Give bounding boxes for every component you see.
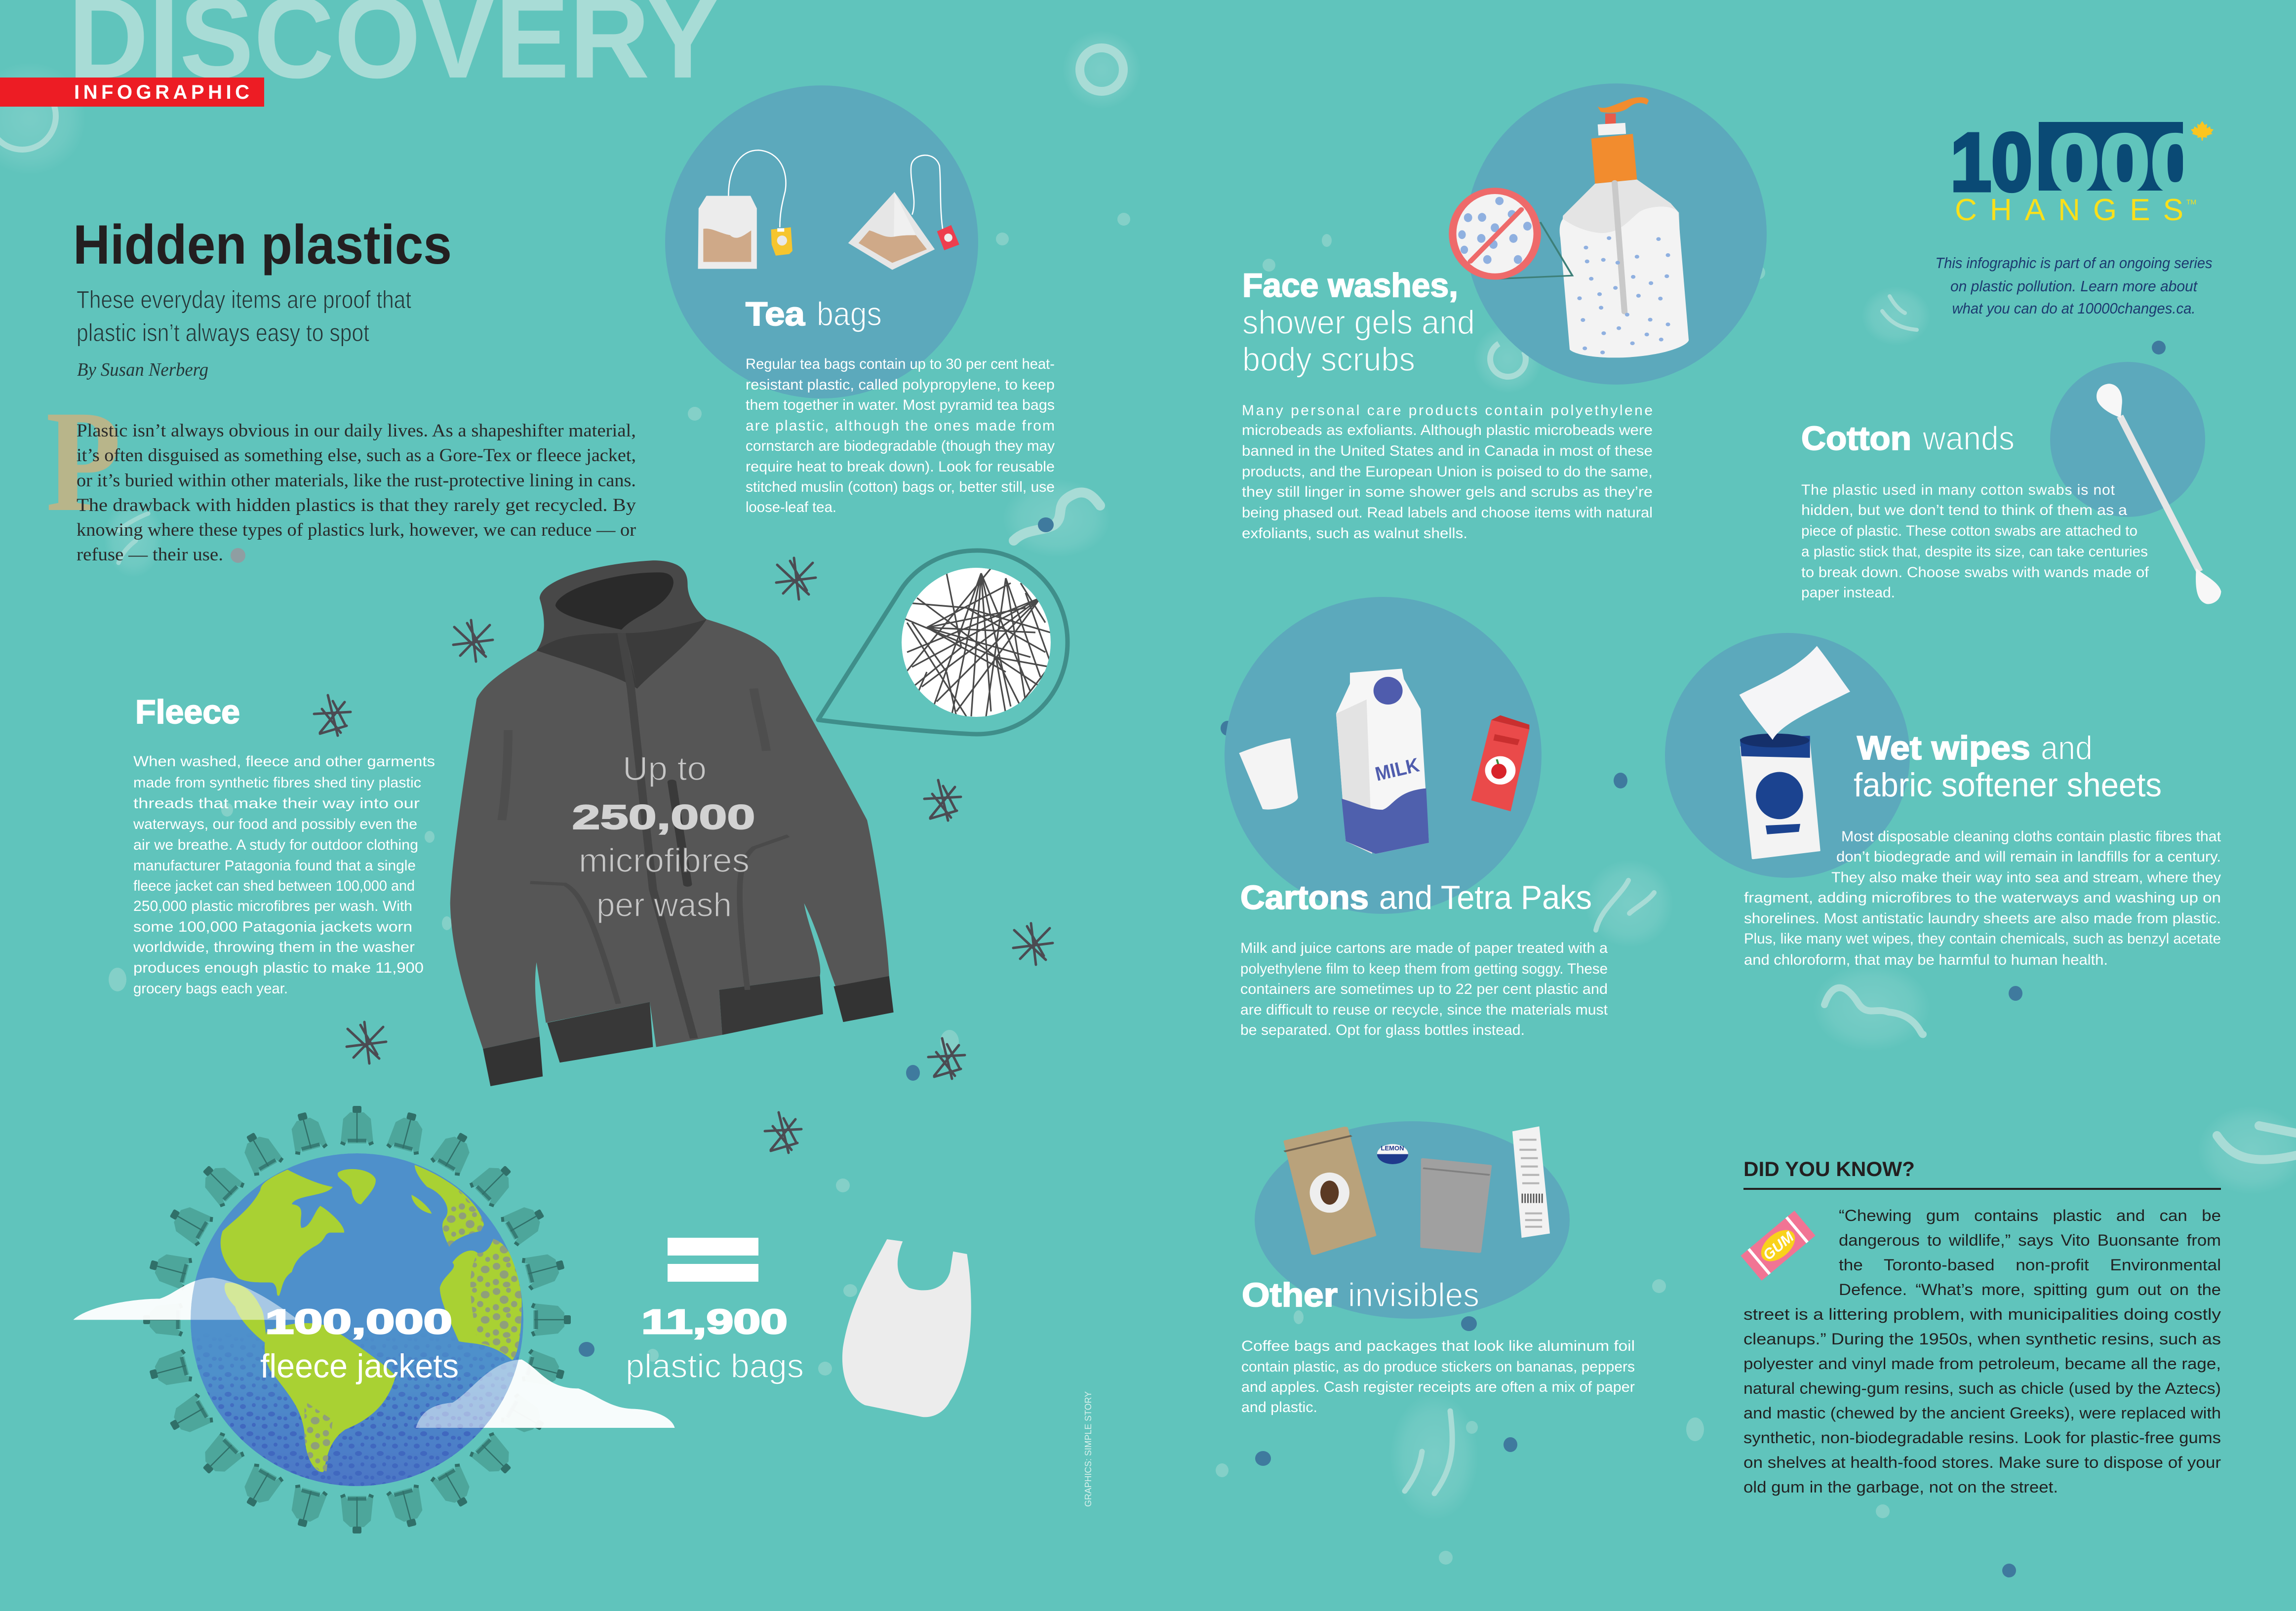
panel: tea bags bbox=[665, 85, 1055, 515]
text: tea bags: stitched muslin (cotton) bags or, better still, use bbox=[746, 479, 1055, 495]
text: did you know: polyester and vinyl made from petroleum, became all the rage, bbox=[1743, 1355, 2221, 1373]
jacket callout text: Up to bbox=[623, 750, 707, 787]
text: cotton wands: hidden, but we don’t tend to think of them as a bbox=[1801, 502, 2127, 518]
text: cartons: polyethylene film to keep them from getting soggy. These bbox=[1240, 961, 1608, 977]
text: wet wipes: They also make their way into sea and stream, where they bbox=[1831, 869, 2221, 886]
icon: square tea bag bbox=[698, 150, 792, 269]
text: cartons: be separated. Opt for glass bottles instead. bbox=[1240, 1022, 1525, 1038]
face wash circle bbox=[1465, 83, 1767, 385]
heading: other invisibles: Other bbox=[1242, 1276, 1338, 1314]
drop cap: P bbox=[46, 380, 121, 542]
heading: tea bags bbox=[746, 295, 882, 333]
icon: cotton swab bbox=[2097, 384, 2221, 604]
text: fleece: made from synthetic fibres shed tiny plastic bbox=[133, 775, 421, 791]
text: tea bags: Regular tea bags contain up to 30 per cent heat- bbox=[746, 356, 1055, 372]
wipes circle bbox=[1665, 633, 1910, 878]
text: did you know: cleanups.” During the 1950s, when synthetic resins, such as bbox=[1743, 1330, 2221, 1348]
icon: pump bottle bbox=[1560, 97, 1689, 357]
infographic tab: INFOGRAPHIC bbox=[74, 81, 249, 103]
text: cartons: Milk and juice cartons are made of paper treated with a bbox=[1240, 940, 1608, 956]
byline: By Susan Nerberg bbox=[77, 359, 208, 380]
text: wet wipes: Plus, like many wet wipes, they contain chemicals, such as benzyl acetate bbox=[1744, 931, 2221, 947]
intro paragraph: or it’s buried within other materials, like the rust-protective lining in cans. bbox=[77, 471, 636, 491]
dark bubbles bbox=[579, 341, 2166, 1577]
icon: plastic bag bbox=[842, 1239, 971, 1417]
icon: end mark bbox=[231, 548, 245, 563]
heading: face washes: body scrubs bbox=[1242, 341, 1415, 378]
intro paragraph bbox=[77, 421, 636, 565]
heading: other invisibles bbox=[1242, 1276, 1479, 1314]
text: tea bags: loose-leaf tea. bbox=[746, 499, 836, 515]
text: fleece: 250,000 plastic microfibres per wash. With bbox=[133, 898, 412, 914]
panel: cotton wands bbox=[1801, 362, 2221, 604]
text: wet wipes: shorelines. Most antistatic laundry sheets are also made from plastic. bbox=[1744, 910, 2221, 927]
carton circle bbox=[1225, 597, 1542, 914]
text: fleece: some 100,000 Patagonia jackets worn bbox=[133, 919, 412, 935]
stat: 100,000 fleece jackets: fleece jackets bbox=[260, 1347, 459, 1385]
text: face washes bbox=[1242, 402, 1653, 542]
text: did you know: the Toronto-based non-profit Environmental bbox=[1839, 1256, 2221, 1274]
text: did you know: Defence. “What’s more, spitting gum out on the bbox=[1839, 1281, 2221, 1298]
logo: 10000 Changes: TM bbox=[2186, 198, 2196, 206]
text: cotton wands: piece of plastic. These cotton swabs are attached to bbox=[1801, 523, 2138, 539]
text: fleece: threads that make their way into our bbox=[133, 795, 420, 812]
panel: did you know bbox=[1741, 1157, 2221, 1496]
text: tea bags: are plastic, although the ones made from bbox=[746, 418, 1055, 434]
text: other invisibles: and plastic. bbox=[1241, 1399, 1317, 1415]
panel: wet wipes bbox=[1665, 633, 2221, 968]
text: fleece: waterways, our food and possibly even the bbox=[133, 816, 417, 832]
text: other invisibles: and apples. Cash register receipts are often a mix of paper bbox=[1241, 1379, 1635, 1395]
icon: gum bbox=[1741, 1211, 1816, 1281]
heading: tea bags: bags bbox=[817, 295, 882, 333]
logo: 10000 Changes: 10 bbox=[1950, 117, 2032, 208]
text: other invisibles bbox=[1241, 1338, 1635, 1415]
heading: face washes: shower gels and bbox=[1242, 304, 1475, 341]
stat: 11,900 plastic bags: 11,900 bbox=[641, 1302, 788, 1341]
text: face washes: microbeads as exfoliants. Although plastic microbeads were bbox=[1242, 422, 1653, 438]
cotton circle bbox=[2050, 362, 2205, 517]
sticker label: LEMON bbox=[1381, 1144, 1404, 1152]
heading: face washes: Face washes, bbox=[1242, 267, 1458, 304]
panel: fleece bbox=[133, 550, 1068, 1086]
logo: 10000 Changes bbox=[1953, 121, 2214, 220]
heading: fleece: Fleece bbox=[135, 693, 240, 731]
text: face washes: products, and the European Union is poised to do the same, bbox=[1242, 464, 1653, 480]
other circle bbox=[1255, 1121, 1570, 1319]
jacket callout text bbox=[572, 750, 755, 924]
text: cartons: are difficult to reuse or recycle, since the materials must bbox=[1240, 1002, 1608, 1018]
text: did you know: “Chewing gum contains plastic and can be bbox=[1839, 1207, 2221, 1224]
earth and jackets bbox=[73, 1106, 675, 1533]
heading: wet wipes: and bbox=[2041, 729, 2093, 767]
text: did you know: on shelves at health-food stores. Make sure to dispose of your bbox=[1743, 1454, 2221, 1471]
clouds over earth bbox=[73, 1278, 675, 1428]
heading: wet wipes: Wet wipes bbox=[1857, 729, 2030, 767]
jacket callout text: per wash bbox=[596, 886, 732, 924]
icon: no microbeads bbox=[1453, 191, 1572, 279]
stat: 100,000 fleece jackets: 100,000 bbox=[265, 1302, 452, 1341]
text: tea bags: resistant plastic, called polypropylene, to keep bbox=[746, 377, 1055, 393]
heading: cotton wands: Cotton bbox=[1801, 420, 1911, 457]
text: cotton wands bbox=[1801, 482, 2149, 601]
text: wet wipes: Most disposable cleaning cloths contain plastic fibres that bbox=[1841, 828, 2221, 845]
icon: wipes canister bbox=[1740, 646, 1850, 859]
milk label: MILK bbox=[1373, 754, 1422, 786]
text: series note bbox=[1936, 254, 2212, 317]
jacket callout text: microfibres bbox=[579, 842, 750, 879]
text: other invisibles: Coffee bags and packages that look like aluminum foil bbox=[1241, 1338, 1635, 1354]
heading: wet wipes: fabric softener sheets bbox=[1854, 766, 2162, 804]
equals sign bbox=[668, 1238, 758, 1282]
clouds behind bbox=[73, 1278, 675, 1428]
text: cotton wands: a plastic stick that, despite its size, can take centuries bbox=[1801, 544, 2148, 560]
text: face washes: banned in the United States and in Canada in most of these bbox=[1242, 443, 1653, 459]
intro paragraph: it’s often disguised as something else, such as a Gore-Tex or fleece jacket, bbox=[77, 445, 636, 466]
stat: 100,000 fleece jackets bbox=[260, 1302, 459, 1385]
text: did you know: natural chewing-gum resins, such as chicle (used by the Aztecs) bbox=[1743, 1379, 2221, 1397]
heading: cartons bbox=[1240, 879, 1592, 916]
heading: did you know: DID YOU KNOW? bbox=[1743, 1157, 1915, 1180]
text: face washes: exfoliants, such as walnut shells. bbox=[1242, 525, 1467, 542]
text: other invisibles: contain plastic, as do produce stickers on bananas, peppers bbox=[1241, 1359, 1635, 1375]
intro paragraph: Plastic isn’t always obvious in our daily lives. As a shapeshifter material, bbox=[77, 421, 636, 441]
heading: cartons: Cartons bbox=[1240, 879, 1369, 916]
subtitle: plastic isn’t always easy to spot bbox=[77, 319, 369, 347]
text: did you know: old gum in the garbage, not on the street. bbox=[1743, 1478, 2058, 1496]
icon: maple leaf bbox=[2191, 121, 2214, 141]
icon: cup, milk carton, juice box bbox=[1239, 668, 1529, 854]
icons: microfibre scribbles bbox=[314, 558, 1053, 1153]
text: series note: This infographic is part of an ongoing series bbox=[1936, 254, 2212, 272]
title: Hidden plastics bbox=[73, 214, 452, 275]
ring of jackets bbox=[143, 1106, 571, 1533]
text: cotton wands: The plastic used in many cotton swabs is not bbox=[1801, 482, 2115, 498]
text: series note: what you can do at 10000changes.ca. bbox=[1952, 300, 2195, 317]
jacket illustration bbox=[450, 560, 894, 1086]
icon: coffee bag, foil bag, receipt bbox=[1284, 1126, 1550, 1254]
text: wet wipes: don’t biodegrade and will remain in landfills for a century. bbox=[1836, 849, 2221, 865]
text: fleece: grocery bags each year. bbox=[133, 981, 288, 997]
heading: cotton wands: wands bbox=[1922, 420, 2015, 457]
text: face washes: Many personal care products contain polyethylene bbox=[1242, 402, 1653, 419]
text: fleece: worldwide, throwing them in the washer bbox=[133, 939, 415, 955]
stat: 11,900 plastic bags: plastic bags bbox=[626, 1347, 804, 1385]
text: cotton wands: to break down. Choose swabs with wands made of bbox=[1801, 564, 2149, 581]
icon: gum: GUM bbox=[1760, 1228, 1797, 1263]
heading: cartons: and Tetra Paks bbox=[1379, 879, 1592, 916]
text: cartons bbox=[1240, 940, 1608, 1038]
logo: 10000 Changes: CHANGES bbox=[1955, 193, 2183, 227]
text: did you know bbox=[1743, 1207, 2221, 1496]
text: did you know: dangerous to wildlife,” says Vito Buonsante from bbox=[1839, 1231, 2221, 1249]
text: did you know: and mastic (chewed by the ancient Greeks), were replaced with bbox=[1743, 1404, 2221, 1422]
intro paragraph: knowing where these types of plastics lurk, however, we can reduce — or bbox=[77, 520, 636, 540]
panel: other invisibles bbox=[1241, 1121, 1635, 1415]
heading: tea bags: Tea bbox=[746, 295, 805, 333]
heading: other invisibles: invisibles bbox=[1348, 1276, 1479, 1314]
logo: 10000 Changes: 000 bbox=[2049, 118, 2201, 209]
text: fleece: air we breathe. A study for outdoor clothing bbox=[133, 837, 418, 853]
graphics credit: GRAPHICS: SIMPLE STORY bbox=[1083, 1391, 1093, 1507]
text: fleece: fleece jacket can shed between 100,000 and bbox=[133, 878, 415, 894]
text: tea bags: require heat to break down). Look for reusable bbox=[746, 459, 1055, 475]
text: fleece: manufacturer Patagonia found that a single bbox=[133, 858, 416, 874]
text: wet wipes bbox=[1744, 828, 2221, 968]
icon: pyramid tea bag bbox=[848, 155, 959, 270]
intro paragraph: refuse — their use. bbox=[77, 545, 223, 565]
stat: 11,900 plastic bags bbox=[626, 1302, 804, 1385]
magnifier: microfibres bbox=[818, 550, 1068, 734]
text: did you know: synthetic, non-biodegradable resins. Look for plastic-free gums bbox=[1743, 1429, 2221, 1447]
text: face washes: they still linger in some shower gels and scrubs as they’re bbox=[1242, 484, 1653, 500]
text: fleece: When washed, fleece and other garments bbox=[133, 753, 435, 770]
subtitle: These everyday items are proof that bbox=[77, 286, 411, 314]
subtitle bbox=[77, 286, 411, 347]
text: cotton wands: paper instead. bbox=[1801, 585, 1895, 601]
text: tea bags: cornstarch are biodegradable (though they may bbox=[746, 438, 1055, 454]
heading: cotton wands bbox=[1801, 420, 2015, 457]
intro paragraph: The drawback with hidden plastics is that they rarely get recycled. By bbox=[77, 495, 636, 515]
planet earth bbox=[188, 1153, 528, 1491]
text: face washes: being phased out. Read labels and choose items with natural bbox=[1242, 505, 1653, 521]
panel: cartons and tetra paks bbox=[1225, 597, 1608, 1038]
text: wet wipes: fragment, adding microfibres to the waterways and washing up on bbox=[1744, 890, 2221, 906]
text: cartons: containers are sometimes up to 22 per cent plastic and bbox=[1240, 981, 1608, 997]
jacket callout text: 250,000 bbox=[572, 798, 755, 836]
text: tea bags bbox=[746, 356, 1055, 515]
text: fleece bbox=[133, 753, 435, 997]
text: wet wipes: and chloroform, that may be harmful to human health. bbox=[1744, 952, 2108, 968]
panel: face washes bbox=[1242, 83, 1767, 542]
heading: face washes bbox=[1242, 267, 1475, 378]
text: did you know: street is a littering problem, with municipalities doing costly bbox=[1743, 1305, 2221, 1323]
text: fleece: produces enough plastic to make 11,900 bbox=[133, 960, 424, 976]
text: series note: on plastic pollution. Learn more about bbox=[1950, 277, 2198, 295]
heading: wet wipes bbox=[1854, 729, 2162, 804]
tea circle bbox=[665, 85, 978, 398]
infographic tab bbox=[0, 78, 264, 107]
text: tea bags: them together in water. Most pyramid tea bags bbox=[746, 397, 1055, 413]
